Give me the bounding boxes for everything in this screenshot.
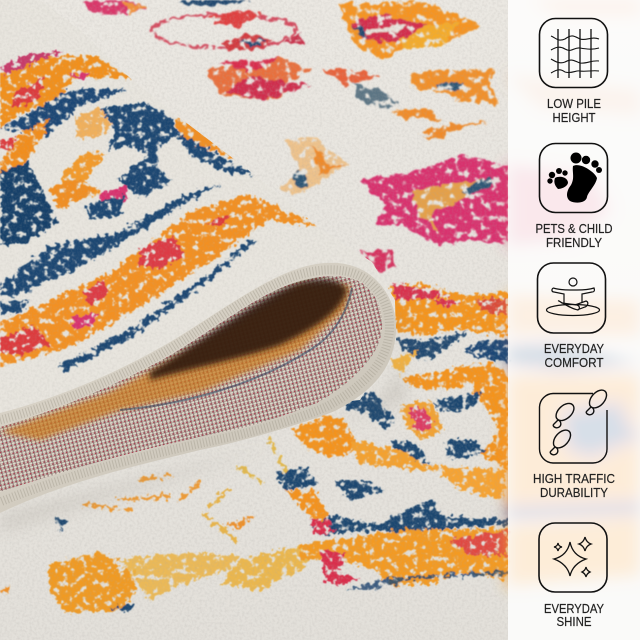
label: HIGH TRAFFIC xyxy=(533,472,615,486)
feature: low pile height: HEIGHT xyxy=(552,111,596,125)
blurred rug colours behind the panel xyxy=(508,0,640,585)
backing navy line xyxy=(120,288,352,410)
floor pattern: lower motifs xyxy=(0,283,508,612)
flap pattern xyxy=(0,51,318,372)
flap pile xyxy=(0,0,396,440)
icon: sparkles xyxy=(539,523,607,592)
floor bottom band xyxy=(48,552,135,612)
feature: everyday shine: SHINE xyxy=(556,615,592,629)
feature: low pile height xyxy=(540,18,608,125)
feature: high traffic durability: DURABILITY xyxy=(540,486,609,500)
rug underside backing xyxy=(0,276,382,492)
icon: pile fibres xyxy=(540,18,608,88)
label: EVERYDAY xyxy=(544,342,605,356)
icon: seated person xyxy=(538,263,606,333)
panel: features sidebar xyxy=(508,0,640,640)
floor flecks xyxy=(85,440,285,540)
feature: everyday comfort xyxy=(538,263,606,370)
feature: everyday comfort: COMFORT xyxy=(544,356,604,370)
rug bound edge xyxy=(0,263,396,513)
floor pattern: upper motifs xyxy=(82,0,508,272)
folded rug flap xyxy=(0,48,396,401)
feature: high traffic durability xyxy=(533,387,615,500)
backing dark shadow xyxy=(150,279,347,380)
shadow under the fold xyxy=(0,300,405,530)
feature: pets and child friendly xyxy=(536,144,612,250)
feature: everyday shine xyxy=(539,523,607,629)
label: PETS & CHILD xyxy=(536,222,612,236)
feature: pets and child friendly: FRIENDLY xyxy=(546,236,603,250)
label: LOW PILE xyxy=(547,97,601,111)
label: EVERYDAY xyxy=(544,602,605,616)
icon: child footprint and paw xyxy=(540,144,608,212)
icon: footprints xyxy=(540,387,610,463)
backing orange print xyxy=(0,285,350,440)
